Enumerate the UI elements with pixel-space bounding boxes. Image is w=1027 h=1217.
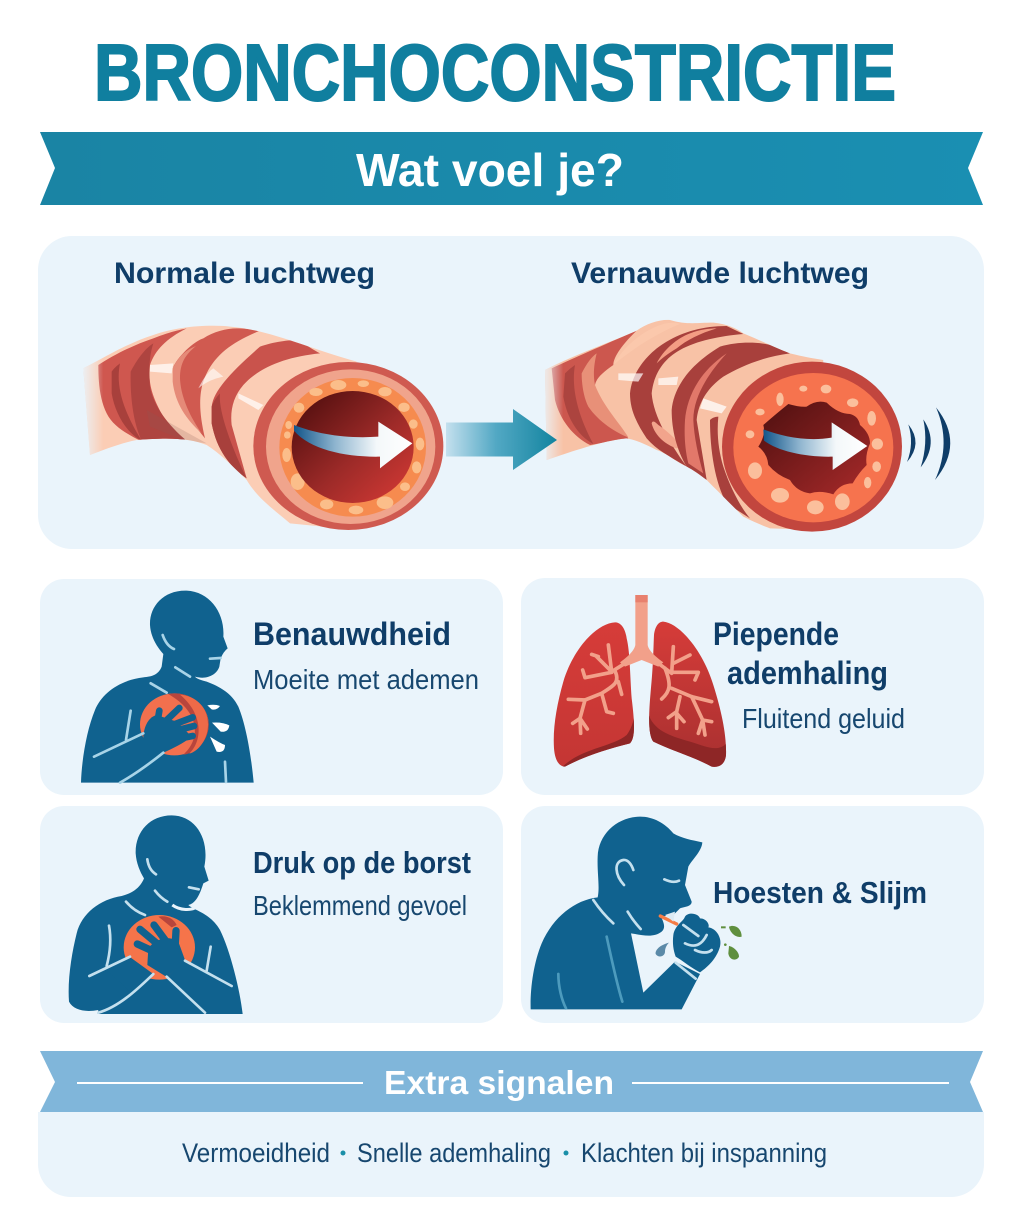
separator dot <box>340 1150 346 1156</box>
sign: Snelle ademhaling: Snelle ademhaling <box>357 1138 551 1168</box>
banner: Extra signalen: Extra signalen <box>384 1064 614 1101</box>
icon: coughing person <box>531 817 742 1009</box>
heading line 2: ademhaling <box>727 655 888 691</box>
banner: Wat voel je?: Wat voel je? <box>356 144 624 196</box>
separator dot <box>564 1150 568 1156</box>
heading: Piepende <box>713 616 839 652</box>
heading: Druk op de borst <box>253 845 471 880</box>
illustration: narrowed airway <box>540 317 950 533</box>
sign: Klachten bij inspanning: Klachten bij inspanning <box>581 1138 827 1168</box>
icon: person with hand on chest <box>81 591 254 783</box>
card: Druk op de borst <box>40 806 503 1023</box>
text: Beklemmend gevoel <box>253 890 467 921</box>
banner: Wat voel je? <box>40 132 983 205</box>
panel: extra signs text area <box>38 1112 984 1197</box>
card: Benauwdheid <box>40 579 503 795</box>
card: Hoesten & Slijm <box>521 806 984 1023</box>
icon: person with hands on chest <box>69 815 243 1014</box>
heading: Hoesten & Slijm <box>713 875 927 910</box>
arrow: normal to narrowed <box>446 409 557 470</box>
panel: airway comparison <box>38 236 984 549</box>
title: BRONCHOCONSTRICTIE <box>94 28 896 117</box>
heading: narrowed airway: Vernauwde luchtweg <box>571 257 869 290</box>
sign: Vermoeidheid: Vermoeidheid <box>182 1138 330 1168</box>
text: Fluitend geluid <box>742 703 905 734</box>
icon: lungs <box>554 595 728 772</box>
icon: wheeze sound waves <box>907 407 950 480</box>
card: Piepende ademhaling <box>521 578 984 795</box>
heading: Benauwdheid <box>253 616 451 652</box>
heading: normal airway: Normale luchtweg <box>114 257 375 290</box>
illustration: normal airway <box>80 320 443 533</box>
banner: Extra signalen <box>40 1051 983 1112</box>
text: Moeite met ademen <box>253 664 479 695</box>
